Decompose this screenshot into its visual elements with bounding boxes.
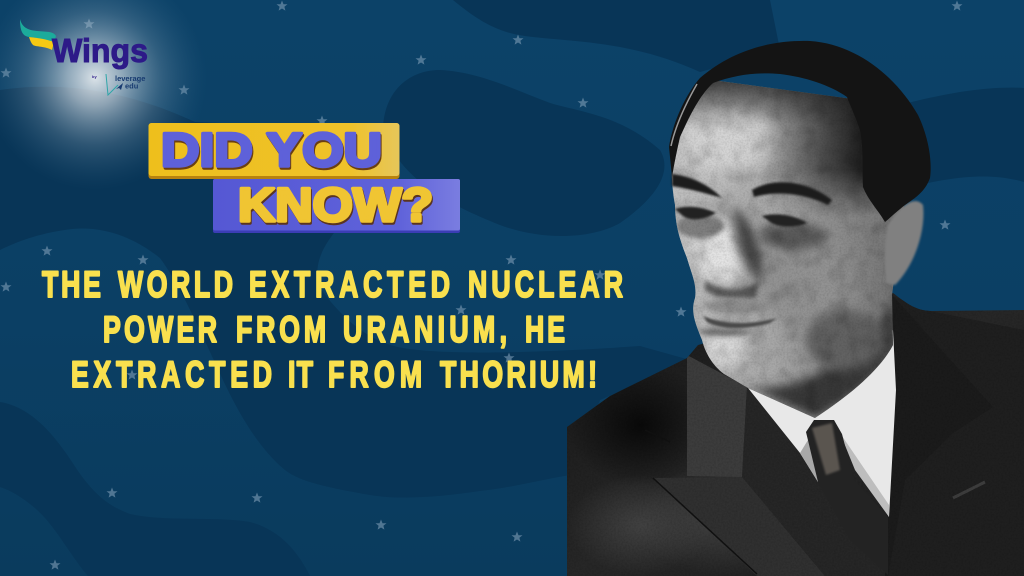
headline line 2: POWER bbox=[103, 309, 217, 350]
left lapel bbox=[687, 355, 747, 477]
tie knot detail bbox=[812, 423, 840, 475]
philtrum bbox=[705, 298, 765, 314]
headline text bbox=[42, 264, 623, 395]
hairline shadow bbox=[687, 81, 848, 122]
nose side shadow bbox=[732, 205, 763, 282]
indigo banner bbox=[213, 178, 460, 233]
headline line 3: EXTRACTED bbox=[71, 354, 272, 395]
mouth bbox=[703, 316, 777, 328]
headline line 3: IT bbox=[288, 354, 313, 395]
logo: edu: edu bbox=[125, 82, 139, 90]
jaw shadow bbox=[745, 300, 895, 418]
skin mottling bbox=[672, 90, 892, 410]
banner text: DID YOU: DID YOU bbox=[161, 123, 382, 176]
left cheek bbox=[678, 232, 702, 278]
ear bbox=[885, 201, 923, 285]
portrait photo bbox=[567, 41, 1024, 576]
banner text: KNOW?: KNOW? bbox=[238, 178, 433, 231]
chest bbox=[746, 482, 785, 526]
logo wordmark: Wings bbox=[52, 33, 148, 70]
right eye bbox=[762, 214, 807, 227]
icon: yellow wing bbox=[29, 37, 54, 50]
banner text: DID YOU: DID YOU bbox=[162, 125, 383, 178]
nose light bbox=[702, 215, 740, 282]
icon: teal wing bbox=[20, 19, 56, 42]
neck bbox=[805, 310, 885, 370]
face and neck bbox=[670, 81, 904, 418]
headline line 1: THE bbox=[42, 264, 101, 305]
necktie bbox=[806, 420, 888, 575]
banner text: KNOW?: KNOW? bbox=[239, 180, 434, 233]
headline line 2: HE bbox=[525, 309, 565, 350]
right eyebrow bbox=[752, 182, 832, 205]
hair bbox=[669, 41, 931, 222]
forehead light bbox=[680, 104, 770, 176]
icon: rocket bbox=[116, 83, 123, 90]
headline line 1: WORLD bbox=[118, 264, 233, 305]
shirt collar bbox=[748, 330, 896, 517]
logo: leverage: leverage bbox=[115, 74, 145, 83]
logo byline: by bbox=[92, 74, 97, 79]
headline line 2: URANIUM, bbox=[343, 309, 507, 350]
forehead right shadow bbox=[770, 90, 877, 212]
left eye bbox=[675, 207, 716, 219]
under-nose shadow bbox=[705, 280, 760, 300]
headline line 3: THORIUM! bbox=[440, 354, 597, 395]
headline line 1: NUCLEAR bbox=[468, 264, 623, 305]
suit jacket bbox=[567, 293, 1024, 576]
logo: Wings by leverage edu bbox=[20, 19, 148, 95]
left eyebrow bbox=[672, 174, 722, 198]
badge: did you know bbox=[148, 123, 460, 233]
lower lapel bbox=[653, 477, 825, 576]
right lapel bbox=[902, 300, 946, 355]
yellow banner bbox=[148, 123, 400, 179]
logo glow bbox=[0, 0, 207, 190]
chin bbox=[703, 332, 747, 368]
icon: leverage check bbox=[106, 74, 118, 95]
headline line 2: FROM bbox=[236, 309, 326, 350]
headline line 1 bbox=[42, 264, 623, 305]
headline line 3 bbox=[71, 354, 597, 395]
cheek bbox=[756, 252, 807, 322]
under-lip shadow bbox=[699, 328, 751, 336]
hair highlight bbox=[671, 84, 697, 146]
eye sockets bbox=[758, 222, 826, 250]
headline line 2 bbox=[103, 309, 565, 350]
headline line 3: FROM bbox=[328, 354, 422, 395]
headline line 1: EXTRACTED bbox=[249, 264, 450, 305]
